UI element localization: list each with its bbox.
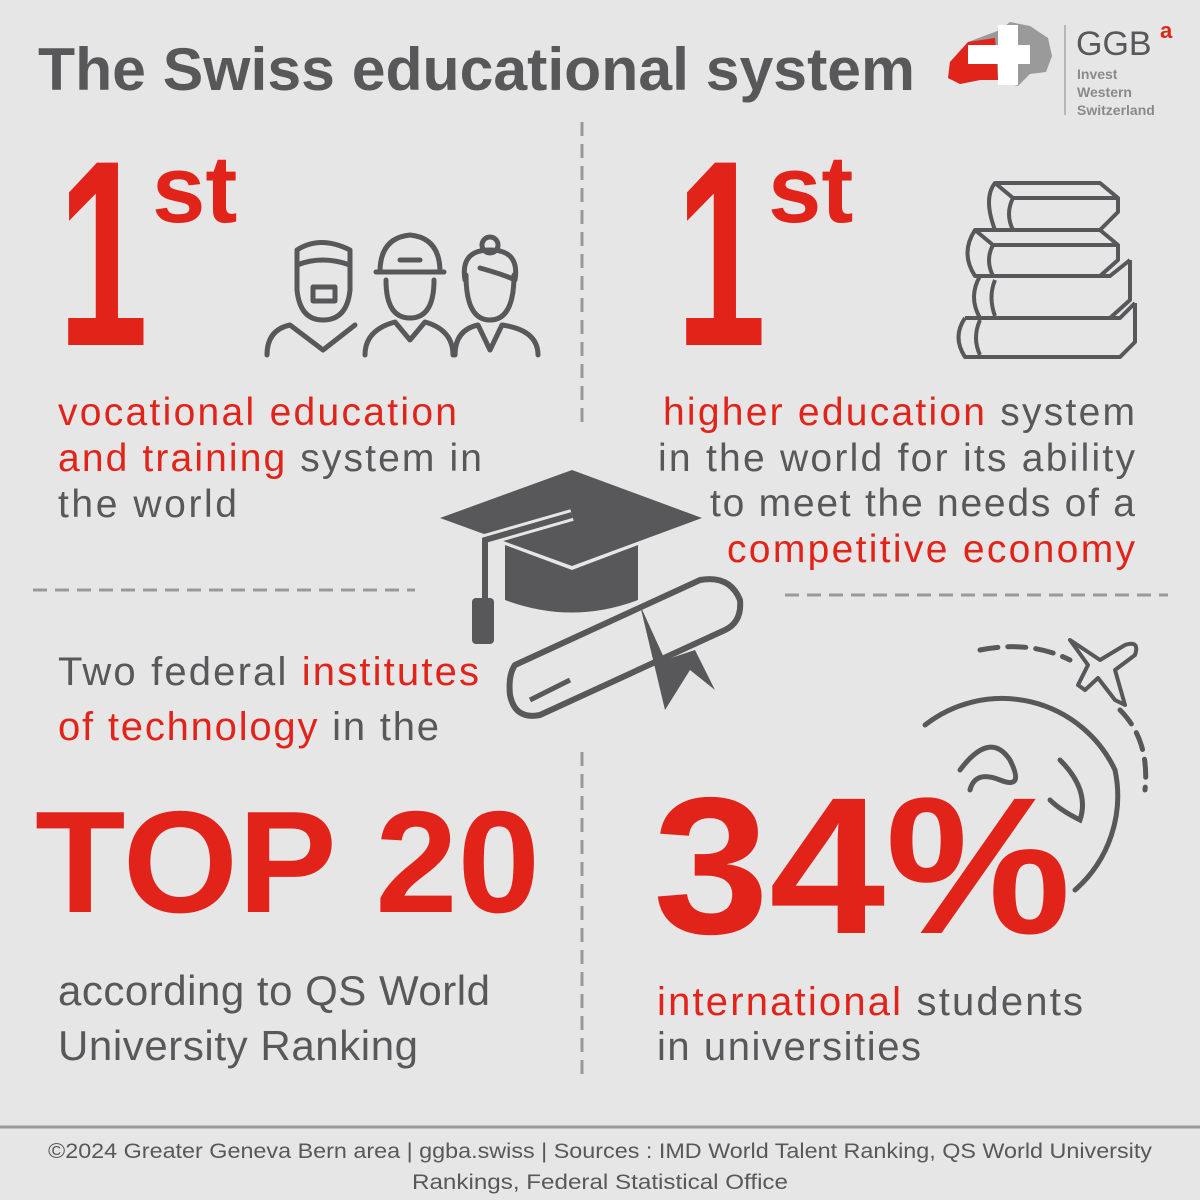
text: federal institutes xyxy=(58,650,479,749)
stat: 1st higher: st xyxy=(768,136,853,243)
stat: 1st vocational: st xyxy=(152,136,237,243)
text: QS ranking: according to QS World xyxy=(58,967,490,1014)
stat: 1st higher: 1 xyxy=(676,106,766,402)
text: vocational: the world xyxy=(58,483,237,526)
icon: workers xyxy=(267,235,538,355)
title: The Swiss educational system xyxy=(38,36,915,103)
text: QS ranking: University Ranking xyxy=(58,1022,418,1069)
text: higher education: to meet the needs of a xyxy=(710,482,1135,525)
text: higher education xyxy=(658,391,1136,571)
text: QS ranking xyxy=(58,967,490,1069)
logo: Switzerland xyxy=(1077,102,1155,118)
text: vocational xyxy=(58,391,482,526)
text: higher education: competitive economy xyxy=(727,528,1136,571)
logo: a xyxy=(1160,18,1173,43)
footer: Rankings, Federal Statistical Office xyxy=(412,1171,788,1194)
text: federal institutes: of technology in the xyxy=(58,705,439,749)
text: international students xyxy=(657,980,1083,1069)
icon: globe and plane xyxy=(925,640,1146,890)
text: vocational: and training system in xyxy=(58,437,482,480)
logo: GGB xyxy=(1076,25,1152,63)
footer xyxy=(0,1127,1200,1194)
text: vocational: vocational education xyxy=(58,391,457,434)
text: higher education: in the world for its ability xyxy=(658,437,1136,480)
stat: 1st vocational: 1 xyxy=(58,106,148,402)
dividers xyxy=(33,122,1168,1080)
text: international students: in universities xyxy=(657,1025,921,1069)
icon: graduation cap and diploma xyxy=(440,470,740,716)
text: federal institutes: Two federal institutes xyxy=(58,650,479,694)
text: international students: international students xyxy=(657,980,1083,1024)
icon: books xyxy=(958,183,1135,357)
logo xyxy=(948,18,1173,118)
text: higher education: higher education system xyxy=(663,391,1135,434)
logo: Western xyxy=(1077,84,1132,100)
stat: TOP 20: TOP 20 xyxy=(35,781,540,943)
footer: ©2024 Greater Geneva Bern area | ggba.swiss | Sources : IMD World Talent Ranking, QS World University xyxy=(48,1140,1153,1163)
stat: 34%: 34% xyxy=(653,757,1071,975)
logo: Invest xyxy=(1077,66,1118,82)
